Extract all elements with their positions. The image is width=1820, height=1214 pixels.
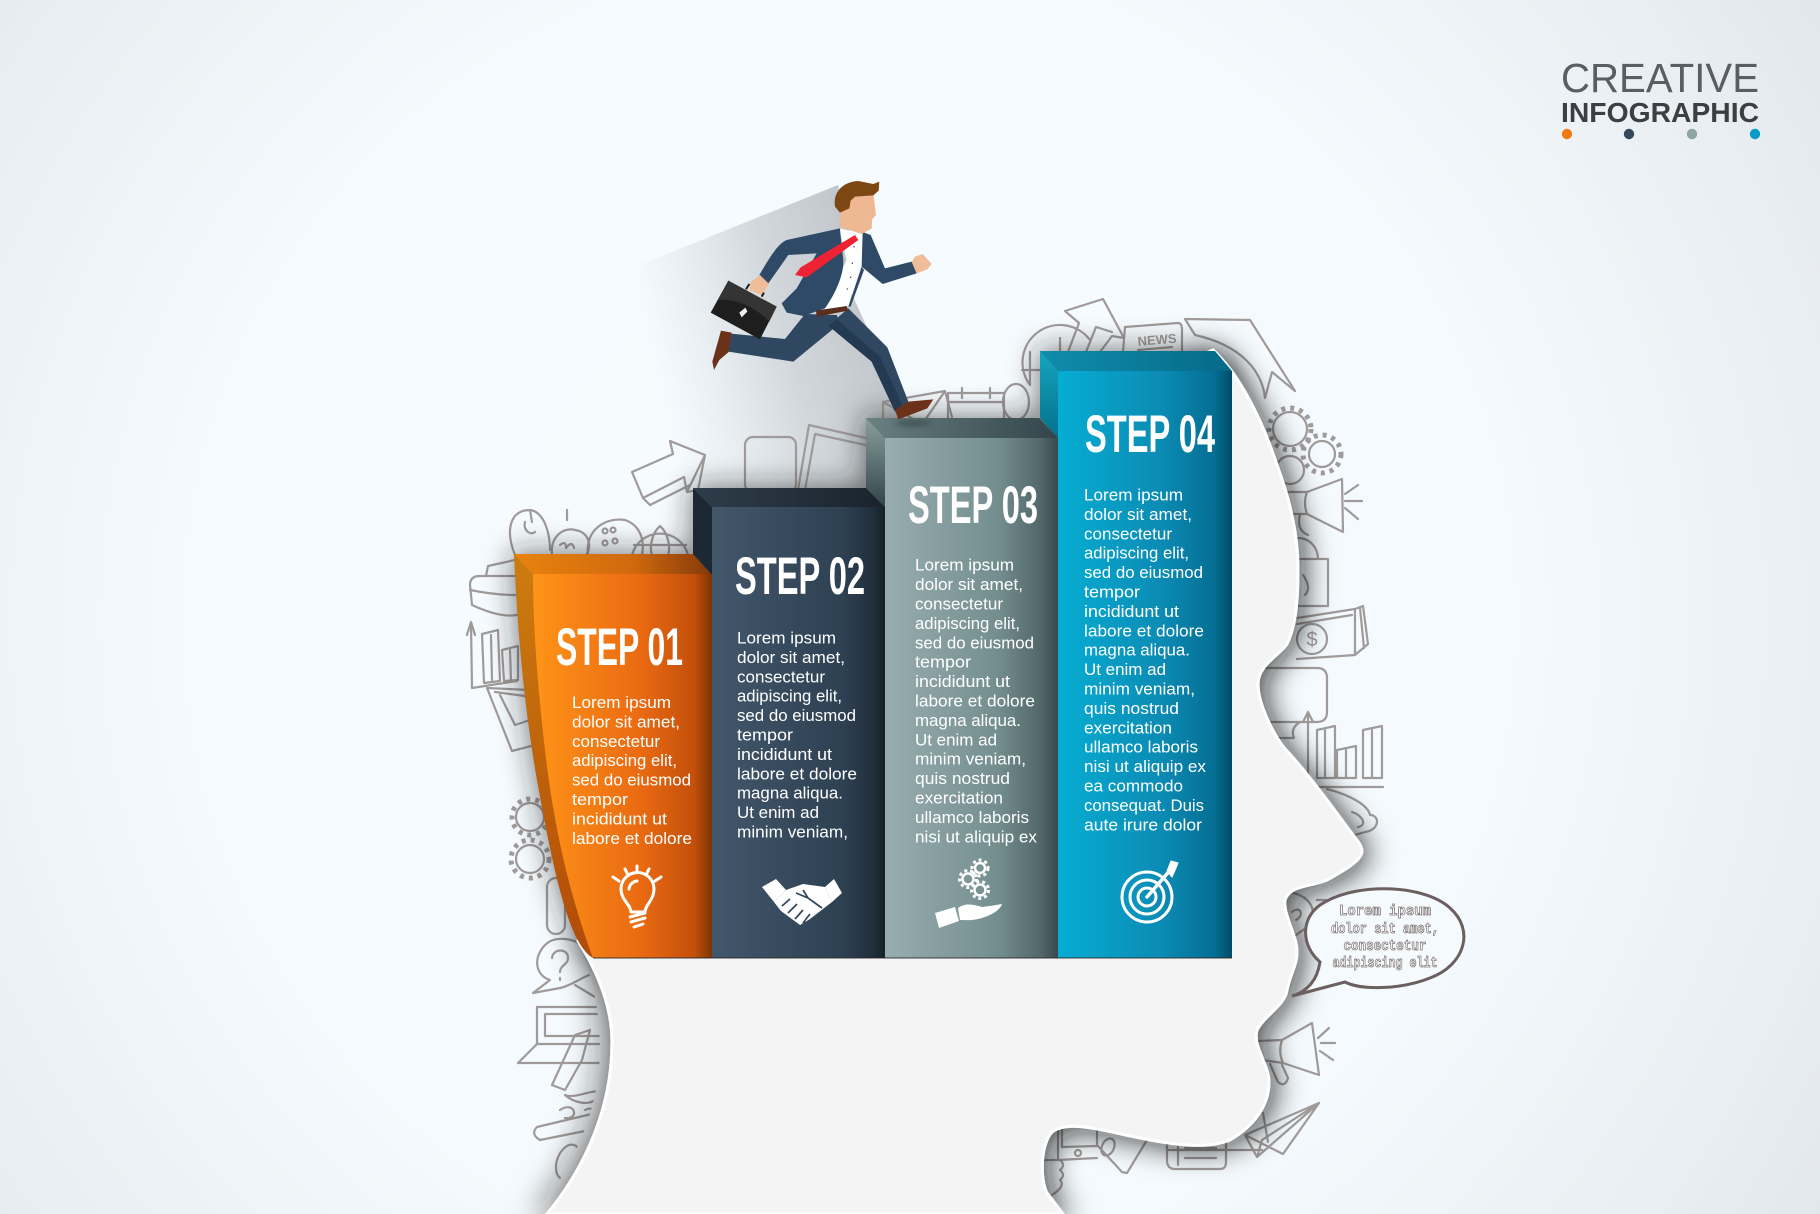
doodle: left mouse [510,510,550,555]
doodle: gears left [511,799,549,878]
doodle: newspaper [1123,323,1182,352]
step 4 text: consectetur [1084,524,1172,543]
step 4 text: Lorem ipsum [1084,486,1183,504]
doodle: curved arrow [1185,319,1295,398]
bubble text: dolor sit amet, [1331,921,1439,938]
doodle: pen curl [1288,892,1327,938]
step 3 text: sed do eiusmod [915,633,1034,652]
step 3 text: ullamco laboris [915,808,1029,827]
step 3 heading: STEP 03 [908,476,1038,535]
icon: handshake [762,879,842,925]
doodle: capsule [547,878,565,934]
step 2 front [712,507,885,958]
doodle: bag [1298,538,1328,606]
doodle: pen and curl [552,1030,600,1118]
step 4 text: dolor sit amet, [1084,505,1192,524]
briefcase hand [750,275,769,295]
doodle: laptop [518,1007,600,1063]
step 3 text: minim veniam, [915,750,1026,769]
step 4 text: exercitation [1084,718,1172,737]
tie [795,235,858,277]
motion streak behind the runner [640,185,905,520]
step 4 front [1058,371,1232,958]
doodle: megaphone [1285,479,1362,535]
bubble text: adipiscing elit [1332,955,1438,972]
belt [816,306,848,317]
step 4 text: sed do eiusmod [1084,563,1203,582]
step 2 text: magna aliqua. [737,784,843,803]
doodle: tablet [798,425,870,490]
shoe contact shadow [895,420,931,426]
step 2 text: incididunt ut [737,745,832,764]
step 3 text: incididunt ut [915,672,1010,691]
step 1 front [533,574,712,958]
step 3 bar [866,418,1058,958]
step 4 text: adipiscing elit, [1084,544,1189,563]
step 2 text: labore et dolore [737,764,857,783]
doodle: megaphone lower [1258,1023,1335,1084]
step 3 text: Lorem ipsum [915,556,1014,575]
near hand [912,254,932,273]
doodle: left bulb [552,510,589,555]
bubble text: Lorem ipsum [1339,903,1431,920]
bubble outline [1292,889,1464,996]
step 2 heading: STEP 02 [735,547,865,606]
step 3 text: labore et dolore [915,692,1035,710]
step 4 side [1040,351,1058,438]
step 4 top [1040,351,1232,371]
icon: light bulb [613,866,661,927]
step 1 text: sed do eiusmod [572,771,691,790]
step 1 text: incididunt ut [572,809,667,828]
doodle: ruler triangle [487,688,535,751]
head silhouette [547,350,1362,1214]
bars bottom edge [593,957,1232,959]
step 1 text [572,693,692,848]
doodle icons behind the head [467,299,1383,1195]
step 2 text: minim veniam, [737,822,848,842]
stair silhouette casting shadow on the background [514,351,1232,958]
bubble text [1331,903,1439,972]
step 4 heading: STEP 04 [1085,405,1215,464]
back leg [728,314,840,362]
doodle: envelope [883,391,952,420]
step 3 side [866,418,885,507]
doodle: dollar coin: $ [1306,629,1318,651]
step 3 text: nisi ut aliquip ex [915,827,1037,846]
back shoe [712,331,732,370]
step 1 top [514,554,712,575]
logo [1561,55,1760,139]
doodle: tablet and hand [1045,1128,1097,1195]
step 4 bar [1040,351,1232,958]
doodle: newspaper: NEWS [1137,331,1177,349]
logo word: infographic: INFOGRAPHIC [1561,97,1759,128]
doodle: question bubble [533,939,600,1000]
step 4 text: incididunt ut [1084,602,1179,621]
doodle: globe [632,526,688,555]
icon: target with arrow [1122,861,1178,922]
step 4 text [1084,486,1206,834]
step 4 text: tempor [1084,582,1140,602]
jacket right panel [848,267,864,307]
doodle: briefcase [470,560,517,616]
step 1 text: Lorem ipsum [572,693,671,712]
step 2 text: adipiscing elit, [737,687,842,706]
front leg [828,308,908,412]
front shoe [895,399,933,419]
step 4 text: minim veniam, [1084,680,1195,698]
doodle: bar chart right [1303,712,1383,787]
step 2 text: Lorem ipsum [737,628,836,648]
doodle: cup [1327,789,1377,838]
doodle: palette [588,520,643,555]
step 3 text: consectetur [915,594,1003,614]
step 2 text: dolor sit amet, [737,648,845,667]
doodle: 3d arrow [632,441,705,505]
step 4 text: labore et dolore [1084,621,1204,640]
step 3 text: Ut enim ad [915,730,997,749]
step 3 text: quis nostrud [915,769,1010,788]
step 1 text: labore et dolore [572,829,692,848]
logo dots [1562,129,1760,139]
step 4 text: magna aliqua. [1084,641,1190,660]
jacket [759,228,843,316]
step 4 text: quis nostrud [1084,699,1179,718]
step 4 text: Ut enim ad [1084,660,1166,679]
step 1 heading: STEP 01 [556,618,683,677]
bubble text: consectetur [1344,938,1426,955]
step 4 text: consequat. Duis [1084,796,1204,815]
businessman figure [711,181,933,419]
step 3 text: tempor [915,653,971,672]
step 1 bar [514,554,712,958]
step 1 text: consectetur [572,732,660,751]
doodle: left chart [467,622,518,688]
doodle: document [1167,1130,1226,1169]
shirt [823,228,863,309]
doodle: gears [1269,408,1341,484]
step 3 text: adipiscing elit, [915,614,1020,633]
logo word: creative: CREATIVE [1561,55,1759,101]
doodle: money [1297,606,1368,659]
step 4 text: aute irure dolor [1084,815,1202,834]
step 2 bar [693,488,885,958]
doodle: pie chart [1022,325,1090,385]
step 2 text: Ut enim ad [737,803,819,822]
step 1 text: dolor sit amet, [572,712,680,731]
doodle: magnifier circle [552,1109,600,1185]
shirt buttons [847,246,854,290]
step 2 text: tempor [737,726,793,744]
doodle: capsule ball [1003,384,1029,420]
hair top [835,181,879,213]
step 3 top [866,418,1058,438]
step 2 side [693,488,712,575]
step 4 text: ullamco laboris [1084,738,1198,757]
step 1 text: tempor [572,790,628,809]
step 3 text: dolor sit amet, [915,575,1023,594]
step bars [514,351,1232,958]
face [839,193,876,234]
far arm [862,232,917,284]
doodle: stick [534,1112,600,1140]
doodle: phone tag [1097,1130,1150,1173]
doodle: notebook [745,437,796,492]
step 3 text: magna aliqua. [915,711,1021,730]
step 2 top [693,488,885,507]
step 4 text: ea commodo [1084,776,1183,796]
gray crescent fold on left of head [535,941,612,1214]
step 2 text: sed do eiusmod [737,706,856,725]
icon: gears on hand [935,860,1002,928]
step 4 text: nisi ut aliquip ex [1084,757,1206,776]
step 1 side [514,554,593,958]
step 3 text: exercitation [915,788,1003,808]
step 2 text: consectetur [737,667,825,686]
step 2 text [737,628,857,842]
speech bubble [1292,889,1464,996]
doodle: calendar [948,388,1004,420]
step 3 text [915,556,1037,846]
doodle: monitor [1255,668,1327,738]
step 1 text: adipiscing elit, [572,751,677,770]
front leg shading [828,319,903,412]
briefcase [711,281,777,339]
doodle: paper plane [1167,1103,1319,1157]
step 3 front [885,438,1058,958]
doodle: dollar coin [1297,624,1327,654]
doodle: up arrow [1065,299,1124,352]
